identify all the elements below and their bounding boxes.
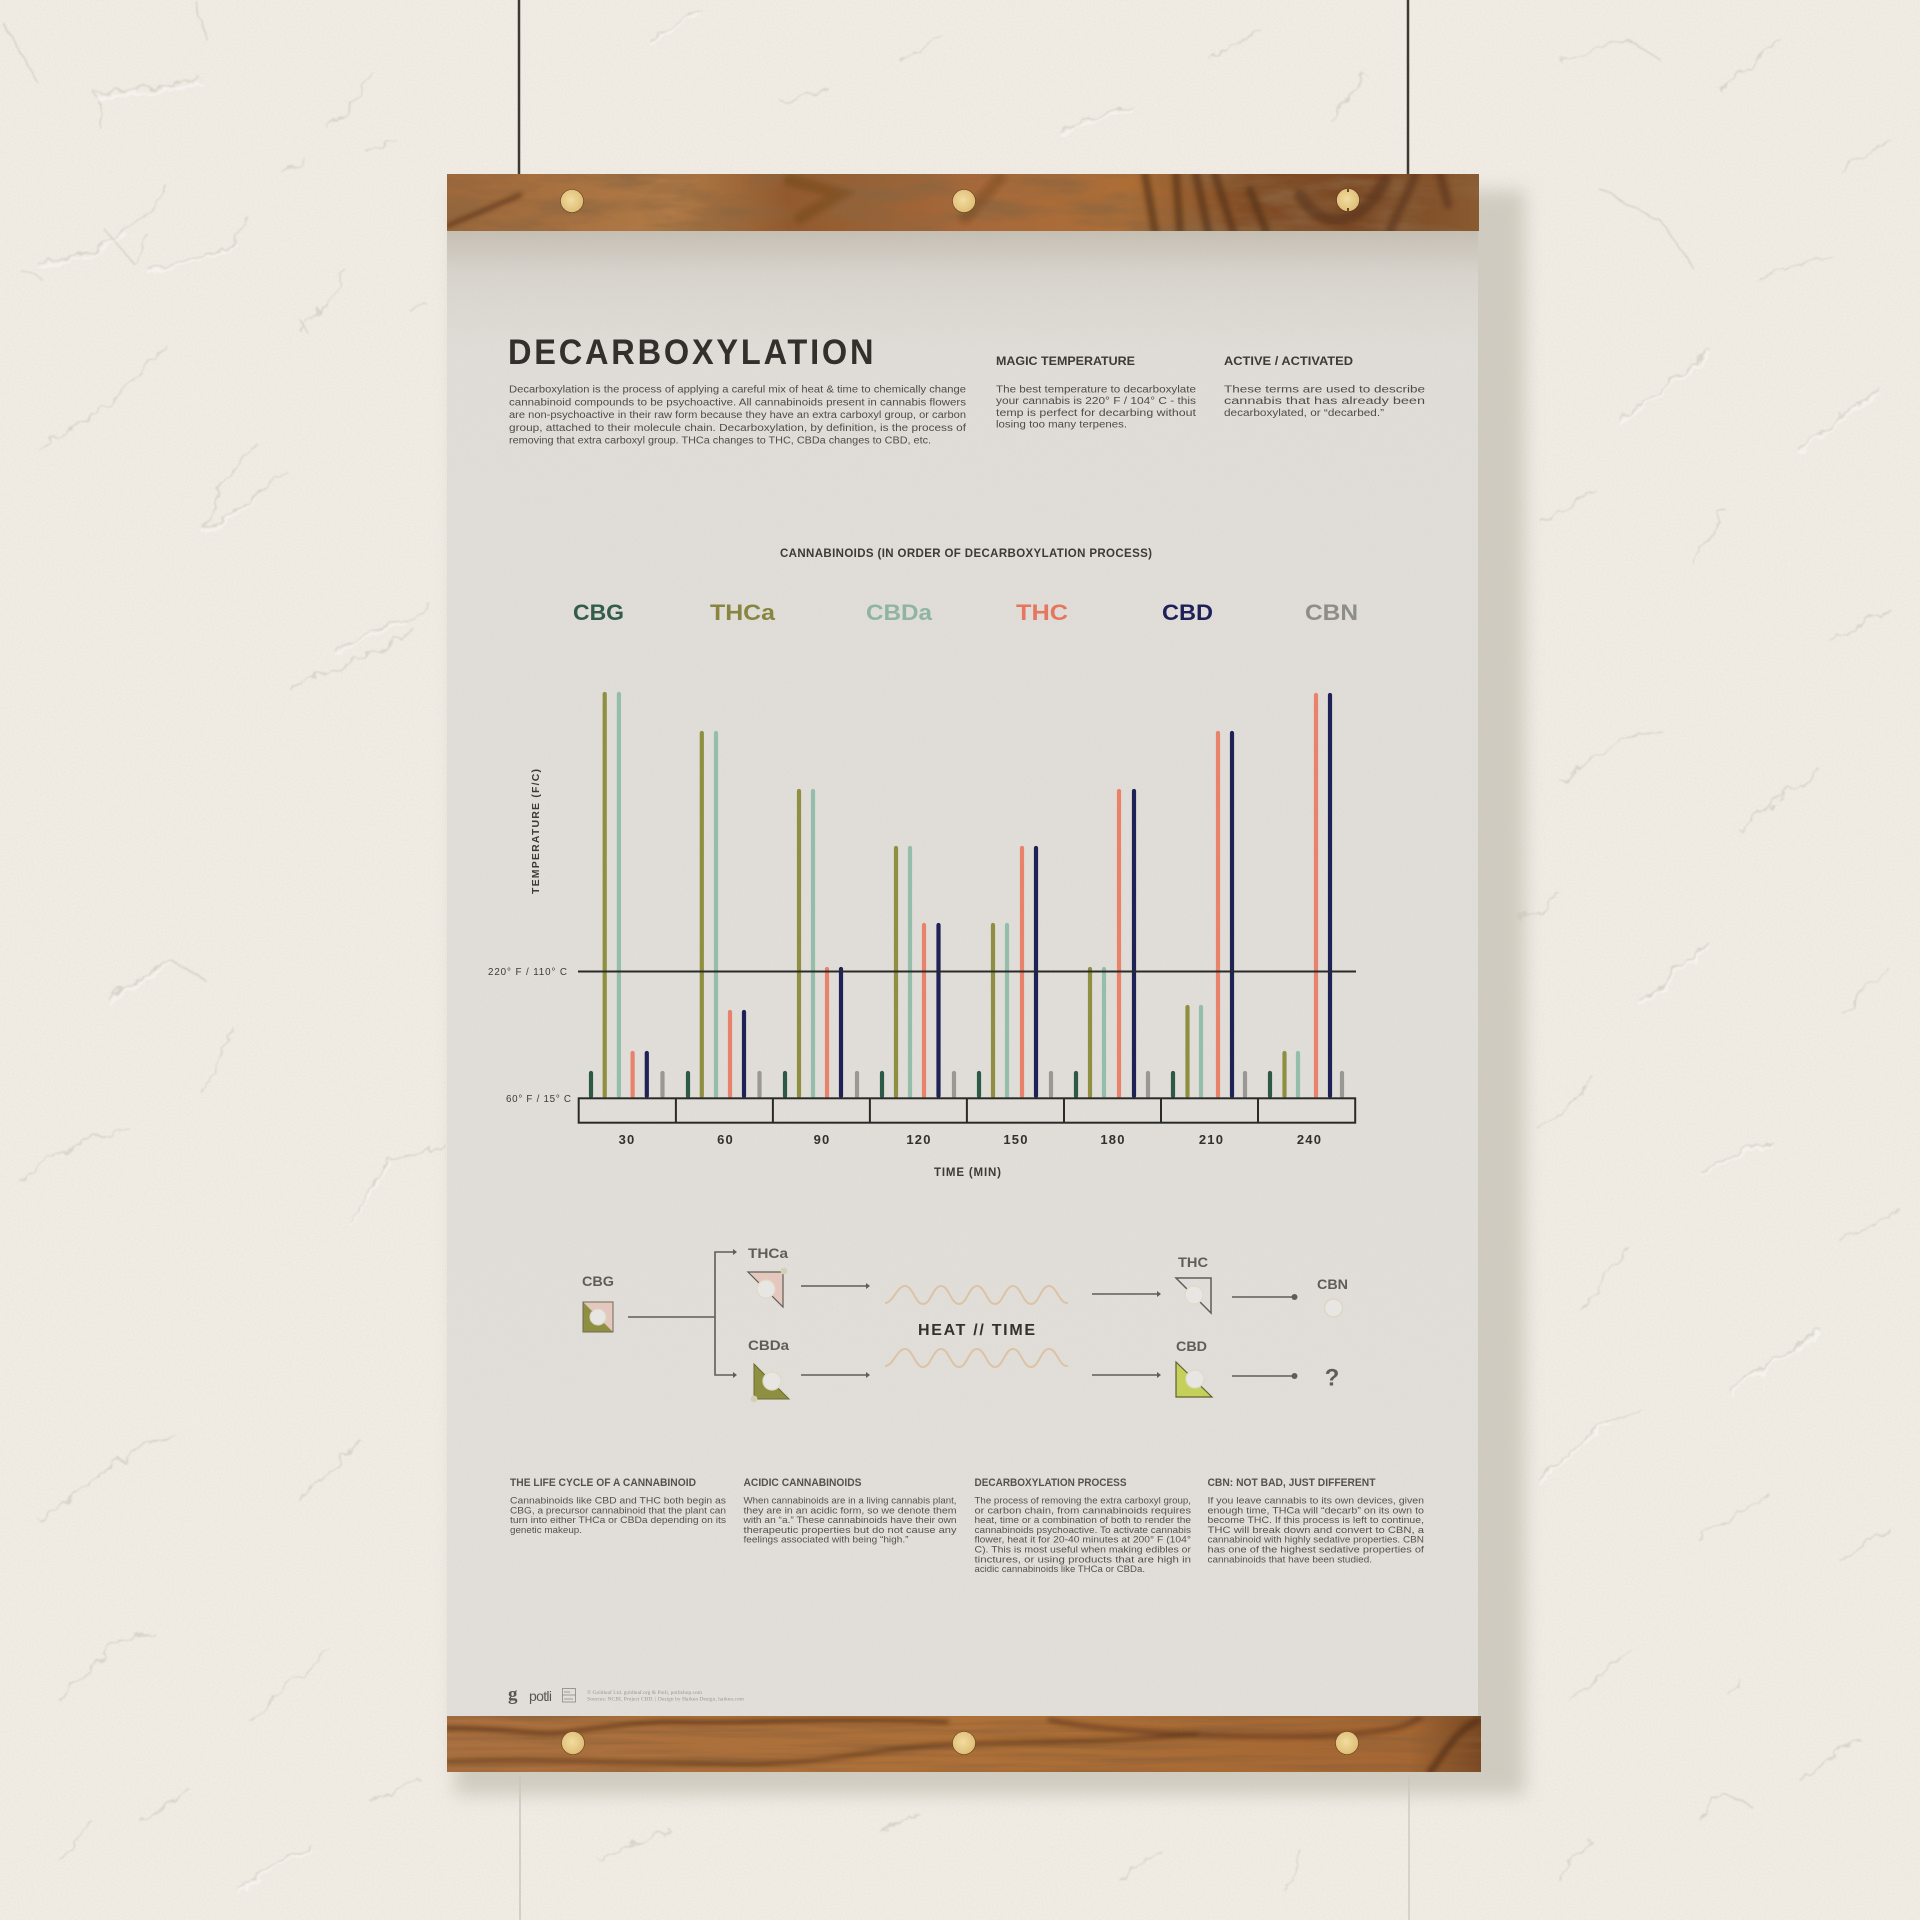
column: life cycle: genetic makeup. (510, 1525, 582, 1535)
column: cbn (1208, 1477, 1425, 1564)
bars: 60 min (688, 733, 760, 1096)
column: acidic cannabinoids: feelings associated with being “high.” (744, 1535, 909, 1545)
node: CBD (1176, 1338, 1212, 1397)
column: life cycle (510, 1477, 727, 1535)
logo: goldleaf: g (508, 1684, 518, 1705)
top wooden hanger (447, 174, 1479, 231)
wall seams (519, 0, 1409, 1920)
legend of cannabinoids: CBG (573, 600, 624, 625)
time labels: 120 (906, 1132, 932, 1147)
bars: 120 min (882, 848, 954, 1096)
bars: 30 min (591, 694, 662, 1096)
node: CBD: CBD (1176, 1338, 1207, 1354)
column: acidic cannabinoids: therapeutic properties but do not cause any (744, 1525, 957, 1535)
bars: 90 min (785, 791, 857, 1096)
time labels: 30 (619, 1132, 635, 1147)
intro paragraph: Decarboxylation is the process of applying a careful mix of heat & time to chemically change (509, 384, 966, 396)
arrows into heat (801, 1283, 870, 1378)
flow diagram (582, 1245, 1348, 1402)
column: cbn: CBN: NOT BAD, JUST DIFFERENT (1208, 1477, 1376, 1489)
column: acidic cannabinoids: with an “a.” These cannabinoids have their own (742, 1515, 957, 1525)
active text: These terms are used to describe (1224, 384, 1426, 396)
paper poster (447, 231, 1478, 1716)
temperature labels (488, 967, 571, 1105)
temperature labels: 60° F / 15° C (506, 1094, 571, 1105)
node: CBDa: CBDa (748, 1337, 789, 1353)
time labels: 60 (717, 1132, 734, 1147)
magic temperature text: temp is perfect for decarbing without (996, 408, 1196, 419)
node: THC: THC (1178, 1254, 1208, 1270)
active text: cannabis that has already been (1224, 396, 1425, 407)
column: decarboxylation process: C). This is most useful when making edibles or (974, 1544, 1191, 1554)
time axis boxes (579, 1098, 1355, 1123)
column: decarboxylation process (974, 1477, 1192, 1574)
column: cbn: enough time, THCa will “decarb” on its own to (1208, 1505, 1424, 1515)
column: cbn: THC will break down and convert to CBN, a (1208, 1525, 1424, 1535)
node: CBN: CBN (1317, 1276, 1348, 1292)
magic temperature text (996, 384, 1197, 430)
y axis label: TEMPERATURE (F/C) (530, 769, 542, 894)
intro paragraph: are non-psychoactive in their raw form because they have an extra carboxyl group, or carbon (509, 410, 966, 421)
legend of cannabinoids: CBN (1305, 600, 1358, 625)
node: CBDa (748, 1337, 789, 1402)
column: life cycle: turn into either THCa or CBDa depending on its (510, 1515, 727, 1525)
intro paragraph: cannabinoid compounds to be psychoactive. All cannabinoids present in cannabis flowers (509, 397, 966, 408)
column: cbn: cannabinoid with highly sedative properties. CBN (1208, 1535, 1424, 1545)
poster cast shadow (455, 190, 1525, 1795)
bottom wooden hanger (447, 1716, 1481, 1772)
footer source text: © Goldleaf Ltd. goldleaf.org & Potli, potlishop.com (587, 1689, 703, 1696)
column: decarboxylation process: cannabinoids psychoactive. To activate cannabis (974, 1525, 1192, 1535)
column: life cycle: CBG, a precursor cannabinoid that the plant can (510, 1505, 726, 1515)
column: decarboxylation process: DECARBOXYLATION PROCESS (974, 1477, 1126, 1489)
intro paragraph: removing that extra carboxyl group. THCa changes to THC, CBDa changes to CBD, etc. (509, 436, 931, 447)
column: acidic cannabinoids: they are in an acidic form, so we denote them (744, 1505, 956, 1515)
top brass screws (560, 188, 1360, 212)
active text: decarboxylated, or “decarbed.” (1224, 408, 1384, 419)
bars: 240 min (1270, 695, 1342, 1096)
intro paragraph: group, attached to their molecule chain. Decarboxylation, by definition, is the process of (509, 423, 966, 434)
220 degree threshold line (578, 970, 1356, 972)
magic temperature text: your cannabis is 220° F / 104° C - this (996, 396, 1196, 407)
magic temperature heading: MAGIC TEMPERATURE (996, 354, 1135, 368)
chart heading: CANNABINOIDS (IN ORDER OF DECARBOXYLATION PROCESS) (780, 548, 1152, 560)
node: THC (1176, 1254, 1211, 1313)
footer source text: Sources: NCBI, Project CBD. | Design by Haiken Design, haiken.com (587, 1696, 745, 1702)
legend of cannabinoids: THC (1016, 600, 1068, 625)
time labels: 240 (1297, 1132, 1322, 1147)
time labels: 90 (814, 1132, 830, 1147)
branch connector (628, 1249, 737, 1378)
column: life cycle: THE LIFE CYCLE OF A CANNABINOID (510, 1477, 696, 1489)
bars: 210 min (1173, 733, 1245, 1096)
active text (1224, 384, 1426, 419)
magic temperature text: losing too many terpenes. (996, 419, 1127, 430)
unknown outcome: ? (1325, 1364, 1339, 1392)
column: decarboxylation process: heat, time or a combination of both to render the (974, 1515, 1191, 1525)
footer source text (587, 1689, 745, 1702)
column: decarboxylation process: flower, heat it for 20-40 minutes at 200° F (104° (974, 1535, 1191, 1545)
time labels: 180 (1100, 1132, 1126, 1147)
connectors to end states (1232, 1294, 1298, 1379)
column: acidic cannabinoids: ACIDIC CANNABINOIDS (744, 1477, 862, 1489)
bars: 150 min (979, 848, 1051, 1096)
column: decarboxylation process: tinctures, or using products that are high in (974, 1554, 1191, 1564)
logo: design box (562, 1688, 576, 1702)
column: acidic cannabinoids: When cannabinoids are in a living cannabis plant, (744, 1496, 956, 1506)
footer credits (508, 1684, 745, 1705)
column: decarboxylation process: The process of removing the extra carboxyl group, (974, 1496, 1191, 1506)
node: CBG: CBG (582, 1273, 614, 1289)
legend of cannabinoids: THCa (710, 600, 776, 625)
title: DECARBOXYLATION (508, 333, 873, 372)
heat and time label: HEAT // TIME (918, 1322, 1035, 1339)
magic temperature text: The best temperature to decarboxylate (996, 384, 1197, 396)
column: cbn: If you leave cannabis to its own devices, given (1208, 1496, 1424, 1506)
column: decarboxylation process: acidic cannabinoids like THCa or CBDa. (974, 1564, 1145, 1574)
column: life cycle: Cannabinoids like CBD and THC both begin as (510, 1496, 727, 1506)
bottom brass screws (562, 1732, 1358, 1754)
node: THCa: THCa (748, 1245, 788, 1261)
intro paragraph (509, 384, 966, 447)
time labels: 150 (1003, 1132, 1029, 1147)
x axis label: TIME (MIN) (934, 1167, 1001, 1179)
logo: potli: potli (529, 1688, 552, 1704)
wave: top (885, 1286, 1068, 1304)
legend of cannabinoids: CBDa (866, 600, 933, 625)
wave: bottom (885, 1349, 1068, 1367)
legend of cannabinoids (573, 600, 1358, 625)
active heading: ACTIVE / ACTIVATED (1224, 354, 1353, 368)
arrows out of heat (1092, 1291, 1161, 1378)
node: THCa (748, 1245, 788, 1307)
time labels: 210 (1199, 1132, 1224, 1147)
column: cbn: cannabinoids that have been studied. (1208, 1554, 1372, 1564)
bar chart (591, 694, 1342, 1096)
legend of cannabinoids: CBD (1162, 600, 1213, 625)
time labels (619, 1132, 1322, 1147)
column: cbn: become THC. If this process is left to continue, (1208, 1515, 1424, 1525)
bars: 180 min (1076, 791, 1148, 1096)
node: CBN (1317, 1276, 1348, 1317)
column: acidic cannabinoids (742, 1477, 957, 1545)
column: cbn: has one of the highest sedative properties of (1208, 1544, 1425, 1554)
node: CBG (582, 1273, 614, 1332)
temperature labels: 220° F / 110° C (488, 967, 567, 978)
column: decarboxylation process: or carbon chain, from cannabinoids requires (974, 1505, 1192, 1515)
